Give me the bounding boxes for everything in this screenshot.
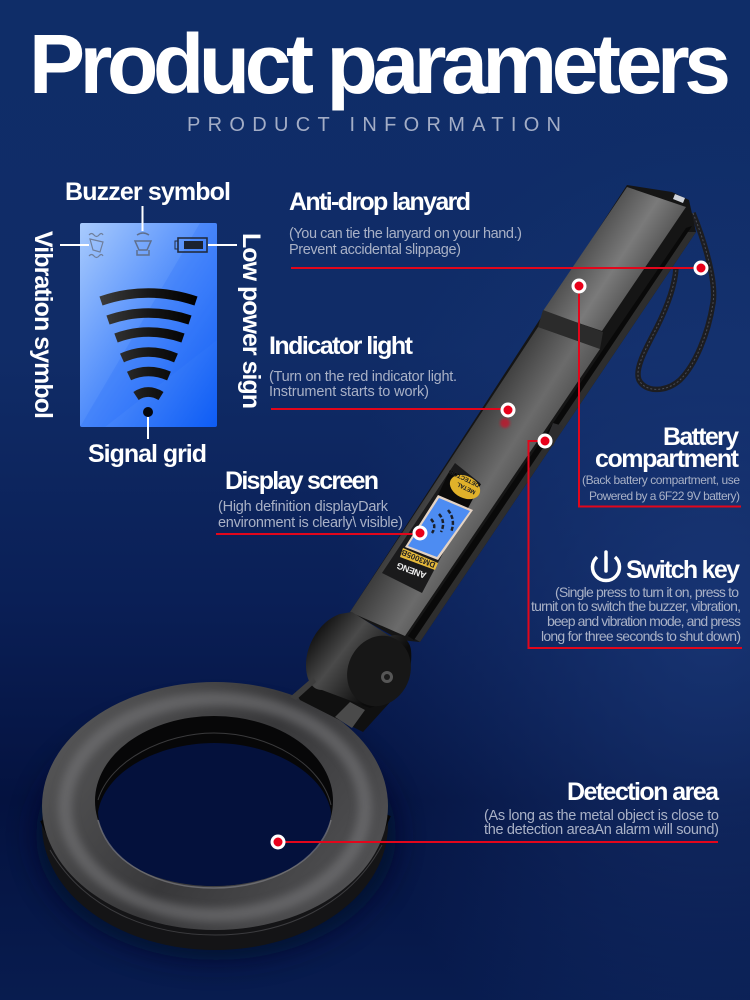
icon: power [593,552,619,581]
hinge [290,612,422,732]
callout: switch key: Switch key [626,556,740,584]
ring lower shell [42,700,388,950]
callout: display screen: environment is clearly\ visible) [218,515,403,531]
title: Product parameters [29,17,731,111]
lanyard [638,213,714,389]
low power label: Low power sign [237,233,265,409]
hinge screw [381,671,393,683]
callout: display screen: Display screen [225,467,379,495]
icon: buzzer symbol [135,233,151,255]
panel: LCD display legend [80,223,217,427]
callout: anti-drop lanyard: (You can tie the lanyard on your hand.) [289,226,522,242]
callout: battery compartment: Powered by a 6F22 9V battery) [589,489,740,503]
lanyard clip [673,194,685,203]
callout: detection area: Detection area [567,778,720,806]
callout: indicator light [269,332,514,428]
handle display plate: METAL [456,480,477,495]
callout: switch key: turnit on to switch the buzzer, vibration, [531,598,741,614]
detection ring [36,682,396,960]
callout: battery compartment [573,280,741,506]
callout: battery compartment: (Back battery compartment, use [582,473,740,487]
callout: detection area: (As long as the metal object is close to [484,808,719,824]
icon: battery symbol [175,238,207,252]
brand: ANENG [395,561,428,581]
signal dot [143,407,153,417]
ring shadow [36,710,396,960]
signal grid label: Signal grid [88,440,207,468]
mini screen [405,495,473,560]
side button [545,423,563,446]
callout: battery compartment: compartment [595,445,740,473]
callout: switch key: beep and vibration mode, and press [547,613,741,629]
detector handle [350,185,696,642]
ring hole [98,743,331,886]
hinge brackets [290,677,316,700]
ring soft highlight [65,699,365,915]
callout: switch key: long for three seconds to shut down) [541,628,741,644]
signal grid label [88,417,207,468]
callout: switch key [528,435,742,648]
handle display plate: DM3005B [400,548,437,569]
handle dark side [350,185,696,642]
callout: battery compartment: Battery [663,423,739,451]
grip band [538,310,603,349]
callout: switch key: (Single press to turn it on, press to [555,584,739,600]
handle display plate [382,463,484,593]
callout: indicator light: Indicator light [269,332,414,360]
callout: anti-drop lanyard: Anti-drop lanyard [289,188,471,216]
buzzer label: Buzzer symbol [65,178,231,206]
handle display plate: DETECTOR [448,467,481,488]
callout: detection area: the detection areaAn alarm will sound) [484,822,719,838]
hinge mount [295,682,392,732]
callout: display screen [216,467,426,539]
callout: display screen: (High definition displayDark [218,499,389,515]
lower grip face [350,327,600,636]
callout: anti-drop lanyard: Prevent accidental slippage) [289,242,461,258]
callout: indicator light: Instrument starts to work) [269,384,429,400]
callout: anti-drop lanyard [289,188,707,274]
hinge cylinder [306,612,411,708]
ring top face [42,682,388,930]
callout: detection area [272,778,720,848]
LCD screen [80,223,217,427]
upper grip face [543,187,686,331]
yellow sticker [438,470,481,508]
ring inner wall [95,716,333,886]
subtitle: PRODUCT INFORMATION [187,114,561,136]
icon: vibration symbol [89,234,103,258]
hinge end cap [336,626,422,716]
signal grid arcs [101,293,196,396]
callout: indicator light: (Turn on the red indicator light. [269,369,457,385]
model label [400,548,438,570]
vibration label: Vibration symbol [29,231,57,419]
